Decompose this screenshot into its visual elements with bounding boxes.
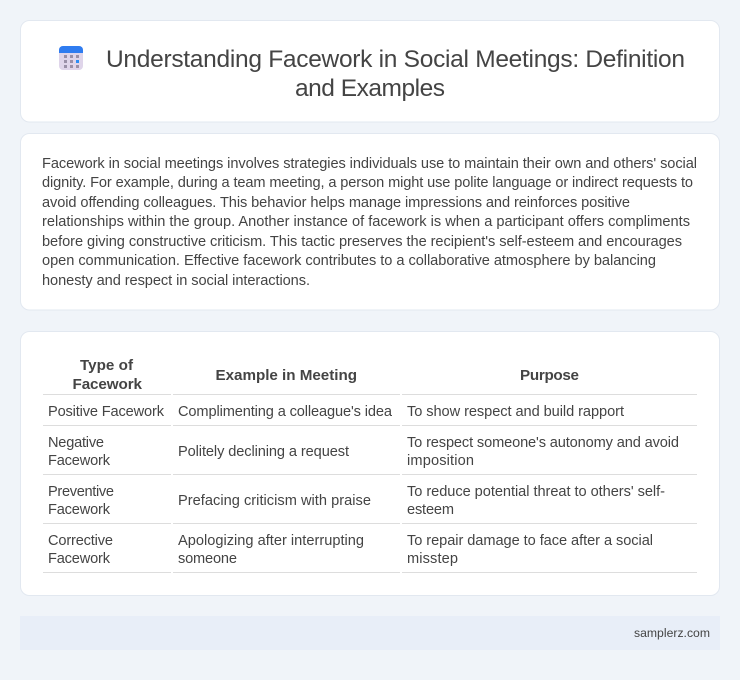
table row: preventive facework: esteem [407,502,454,518]
table row: negative facework: Facework [48,453,111,469]
text block: description paragraph: Facework in social meetings involves strategies individuals use to maintain their own and others' social [42,156,697,172]
table row: negative facework: To respect someone's autonomy and avoid [407,435,679,451]
panel: table card [20,332,720,596]
table row: preventive facework: Facework [48,502,111,518]
title: and Examples [295,75,445,102]
table row: negative facework: Negative [48,435,104,451]
title [106,46,685,102]
panel: description [20,134,720,310]
footer [20,616,720,650]
table row: corrective facework: To repair damage to face after a social [407,533,653,549]
title: Understanding Facework in Social Meetings: Definition [106,46,685,73]
table header [43,357,697,394]
table row: negative facework: Politely declining a request [178,444,349,460]
table header: Purpose [520,367,579,384]
table header: Type of [80,357,134,374]
text block: description paragraph: relationships within the group. Another instance of facework is when a participant offers compliments [42,214,690,230]
text block: description paragraph: dignity. For example, during a team meeting, a person might use polite language or indirect requests to [42,175,693,191]
table row: preventive facework [43,484,697,524]
text block: description paragraph: honesty and respect in social interactions. [42,273,310,289]
table row: preventive facework: To reduce potential threat to others' self- [407,484,665,500]
table row: corrective facework: Corrective [48,533,113,549]
text block: description paragraph [42,156,697,289]
table row: corrective facework: someone [178,551,237,567]
text block: description paragraph: avoid offending colleagues. This behavior helps manage impressions and reinforces positive [42,195,630,211]
table row: corrective facework: Apologizing after interrupting [178,533,364,549]
table row: positive facework: Complimenting a colleague's idea [178,404,393,420]
icon: calendar [59,46,83,70]
table row: negative facework [43,435,697,474]
table row: corrective facework: misstep [407,551,458,567]
table row: positive facework: To show respect and build rapport [407,404,624,420]
table header: Facework [72,376,143,393]
table row: preventive facework: Preventive [48,484,114,500]
panel: title card [20,20,720,122]
table header: Example in Meeting [216,367,357,384]
table row: corrective facework [43,533,697,572]
table row: negative facework: imposition [407,453,474,469]
table row: corrective facework: Facework [48,551,111,567]
text block: description paragraph: open communication. Effective facework contributes to a collaborative atmosphere by balancing [42,253,656,269]
table row: positive facework [43,404,697,426]
table row: positive facework: Positive Facework [48,404,165,420]
footer: samplerz.com [634,626,710,640]
table row: preventive facework: Prefacing criticism with praise [178,493,371,509]
text block: description paragraph: before giving constructive criticism. This tactic preserves the recipient's self-esteem and encourages [42,234,682,250]
